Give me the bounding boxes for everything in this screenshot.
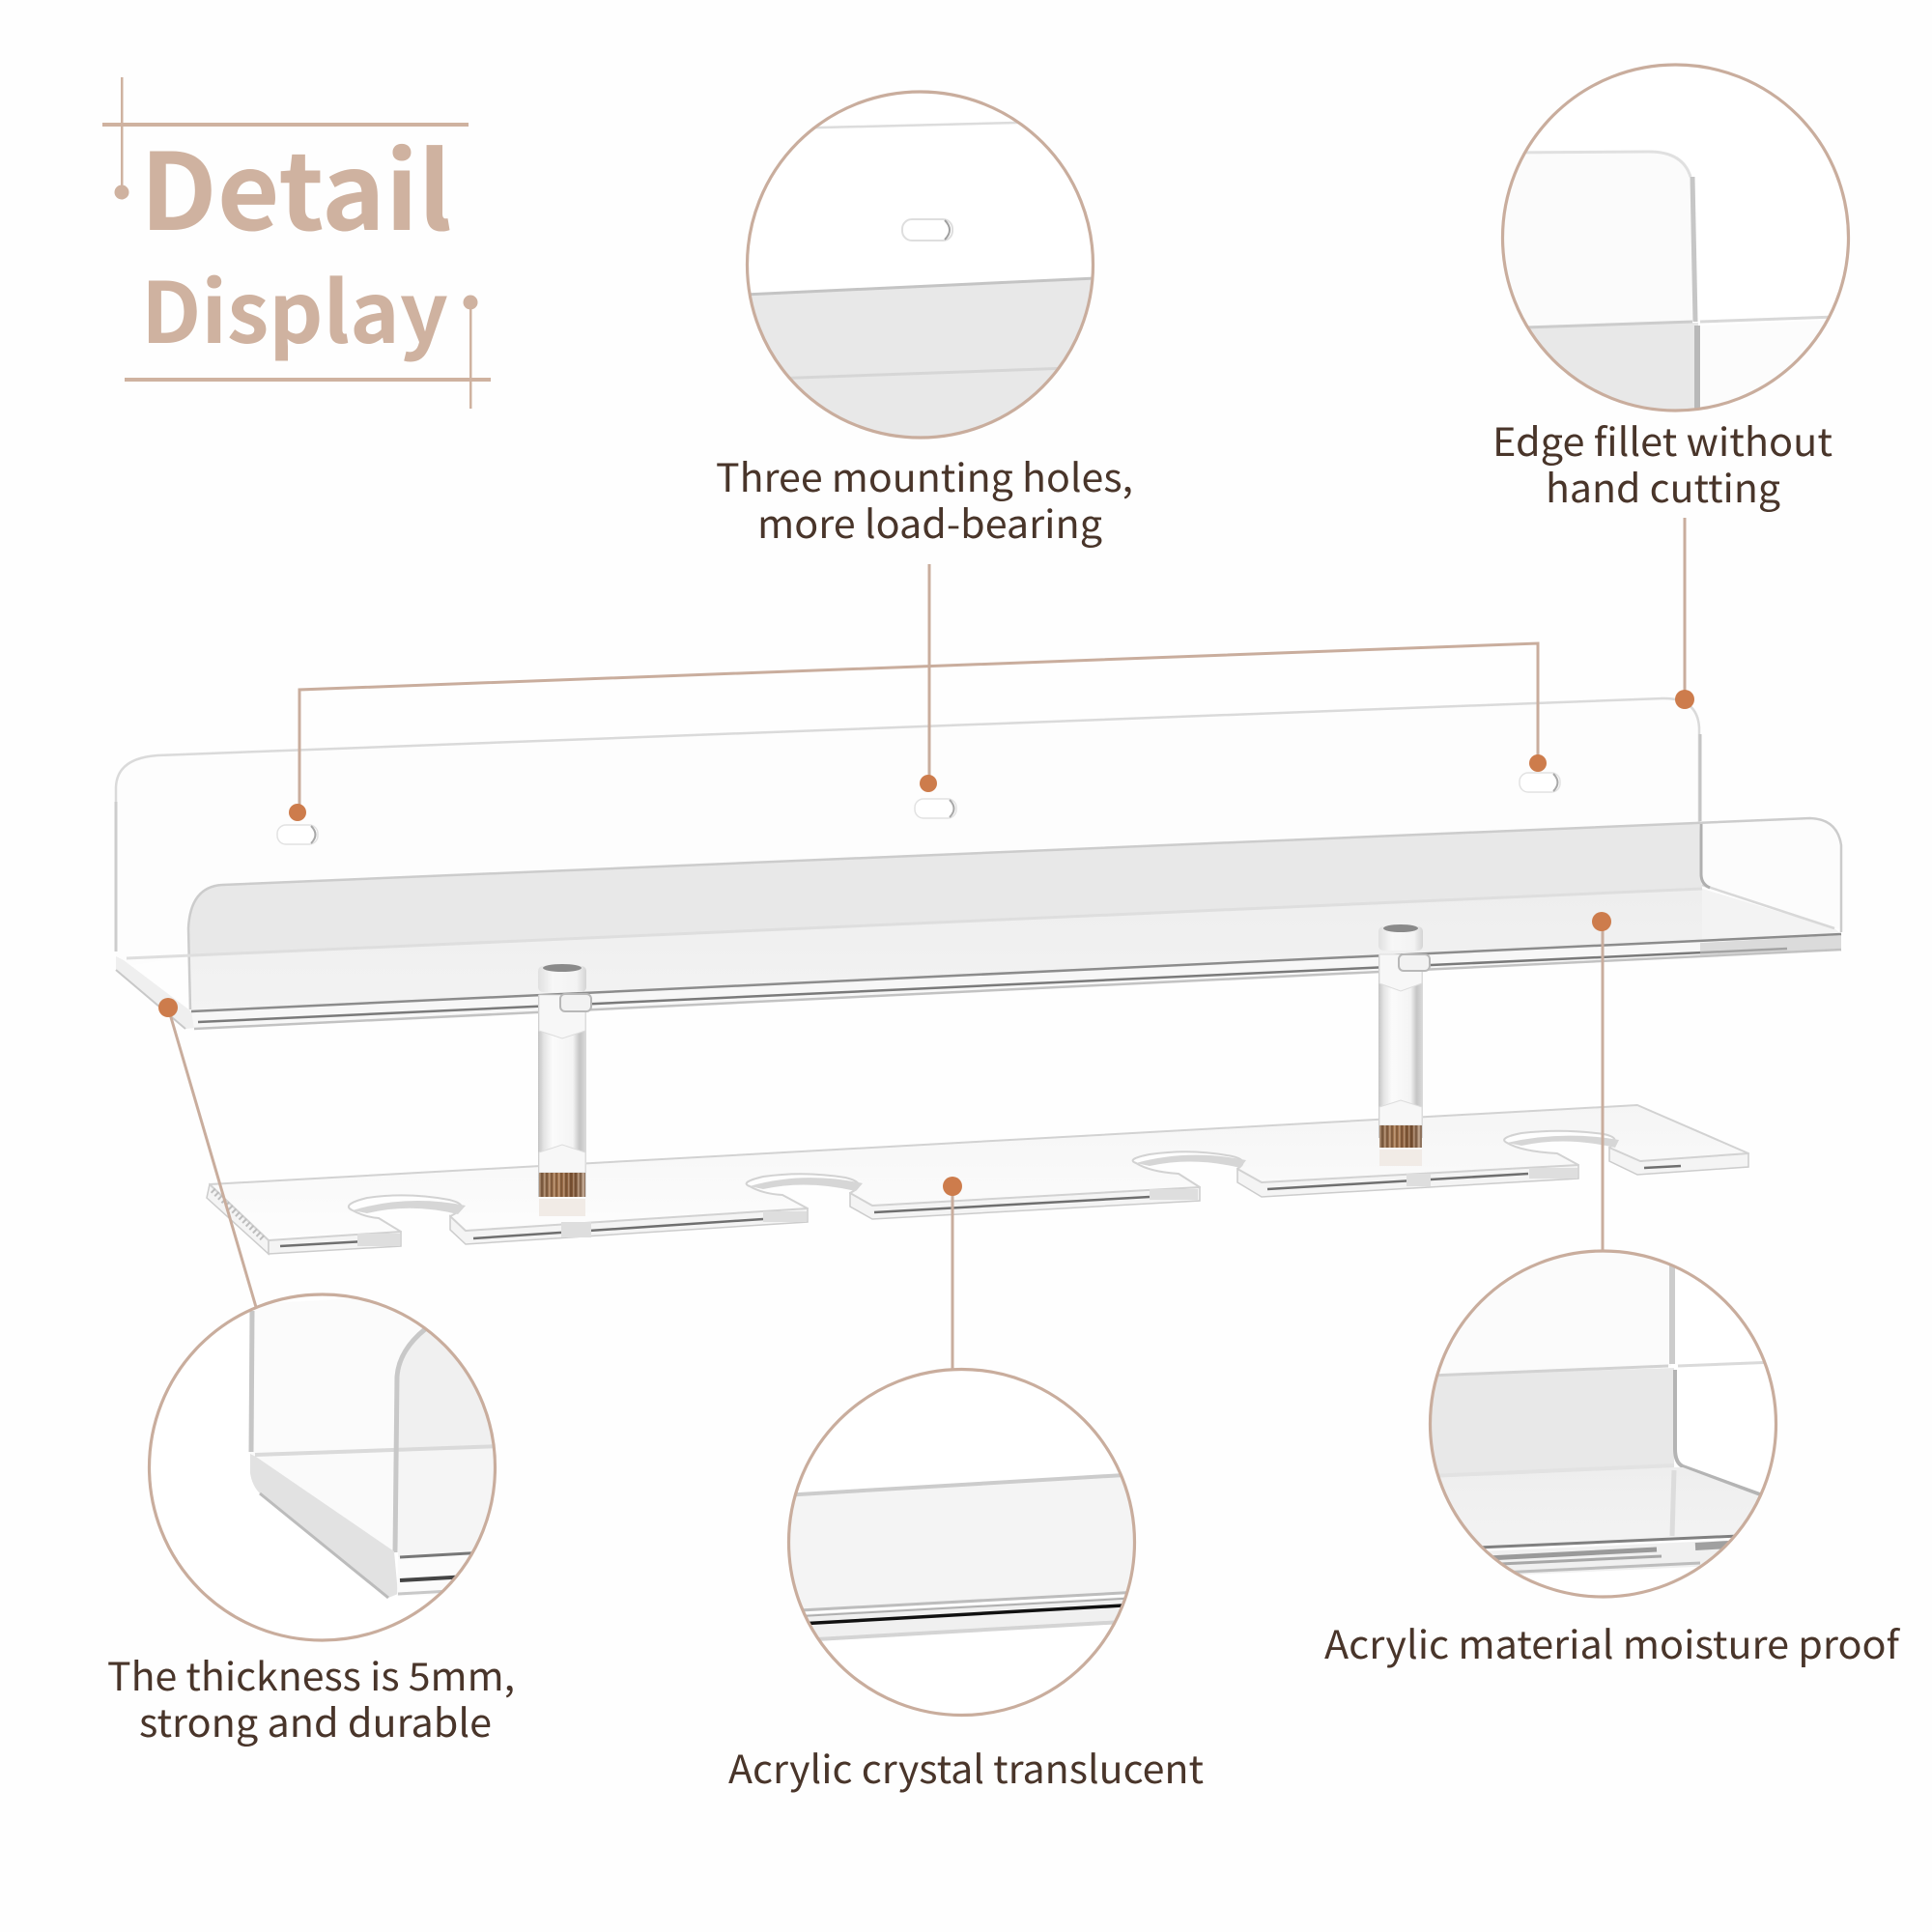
caption: mounting holes: more load-bearing — [757, 494, 1102, 550]
caption: mounting holes: Three mounting holes, — [716, 447, 1133, 503]
shelf floor — [189, 889, 1702, 1011]
base plate — [207, 1105, 1748, 1254]
right post — [1378, 924, 1430, 1166]
right end wall and floor — [1702, 818, 1841, 928]
slot inner walls — [353, 1136, 1619, 1214]
title block: Detail Display — [102, 77, 491, 409]
leader lines — [168, 518, 1685, 1369]
detail circle: crystal translucent — [782, 1362, 1140, 1719]
front panel shaded area — [188, 823, 1702, 1011]
detail circle: edge fillet — [1497, 58, 1855, 415]
knurled left edge — [213, 1190, 265, 1240]
caption: edge fillet: hand cutting — [1546, 458, 1780, 514]
front panel edges — [188, 818, 1841, 1009]
caption: moisture proof: Acrylic material moisture proof — [1324, 1614, 1901, 1670]
caption: edge fillet — [1492, 412, 1833, 514]
caption: mounting holes — [716, 447, 1133, 550]
mounting holes — [277, 773, 1560, 844]
plate top face — [210, 1105, 1748, 1240]
caption: edge fillet: Edge fillet without — [1492, 412, 1833, 468]
left post — [538, 964, 591, 1216]
marker dots — [158, 690, 1694, 1196]
product: acrylic shelf — [116, 698, 1841, 1254]
plate edge reflections — [280, 1166, 1681, 1246]
caption: thickness — [107, 1646, 515, 1748]
plate front edges — [207, 1148, 1748, 1254]
detail circle: thickness — [145, 1290, 502, 1647]
caption: crystal translucent: Acrylic crystal translucent — [728, 1739, 1204, 1795]
detail circle: moisture proof — [1425, 1246, 1782, 1604]
left floor bevel — [116, 956, 196, 1029]
caption: thickness: The thickness is 5mm, — [107, 1646, 515, 1702]
detail circle: mounting holes — [744, 87, 1101, 444]
title block: Detail Display: Detail — [140, 106, 452, 261]
title block: Detail Display: Display — [141, 246, 448, 368]
back panel — [116, 698, 1699, 968]
front lower edge strip — [191, 934, 1841, 1029]
caption: thickness: strong and durable — [139, 1692, 492, 1748]
